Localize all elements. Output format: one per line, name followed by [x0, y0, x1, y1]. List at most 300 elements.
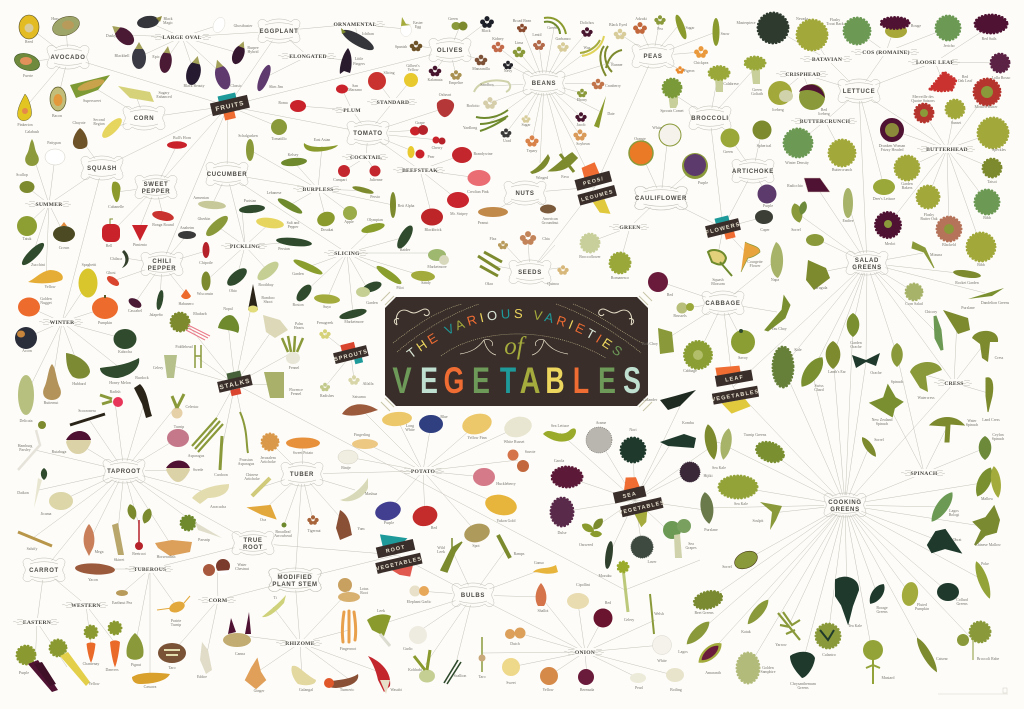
icon: grape tomato: Grape [415, 121, 425, 125]
icon: golden samphire [737, 653, 776, 683]
group: cooking greens [678, 423, 1003, 690]
icon: deers lettuce: Deer's Lettuce [873, 197, 895, 201]
icon: bintje: Bintje [341, 466, 351, 470]
icon: roma: Roma [278, 101, 288, 105]
icon: ghostbuster: Ghostbuster [234, 24, 253, 28]
icon: beet greens [692, 589, 724, 615]
hub: artichoke: ARTICHOKE [732, 169, 774, 175]
group: cucumbers [193, 119, 449, 324]
icon: caper: Caper [760, 228, 770, 232]
icon: poke: Poke [981, 562, 989, 566]
icon: yau choy: Yau Choy [771, 327, 787, 331]
group: tomatoes [278, 64, 493, 232]
icon: cipollini [567, 583, 590, 609]
hub: broccoli [689, 106, 731, 130]
icon: wild leek: Leek [437, 550, 445, 554]
icon: cascabel: Cascabel [128, 309, 142, 313]
hub: true root: TRUE [243, 538, 263, 544]
icon: pignut: Pignut [131, 663, 142, 667]
icon: easter egg: Easter [413, 21, 424, 25]
icon: tigernut: Tigernut [307, 529, 322, 533]
icon: catsear: Catsear [936, 657, 949, 661]
icon: celery: Celery [624, 618, 634, 622]
hub: standard: STANDARD [377, 100, 409, 106]
icon: ichiban: Ichiban [362, 32, 374, 36]
icon: prussian asparagus [238, 412, 255, 466]
hub: large framed labels [23, 19, 888, 607]
hub: burpless: BURPLESS [303, 187, 333, 193]
icon: flashy butter oak: Butter Oak [920, 217, 938, 221]
hub: chili pepper [141, 252, 183, 276]
icon: taro: Taro [168, 666, 176, 670]
icon: yellow finn [460, 410, 494, 440]
hub: slicing [324, 249, 368, 257]
banner: stalks [216, 368, 254, 399]
icon: tom thumb [967, 233, 995, 267]
icon: garden peer: Garden [292, 272, 304, 276]
icon: shallot [536, 583, 549, 613]
icon: cranberry [592, 79, 621, 89]
hub: lettuce [838, 79, 880, 103]
title: VEGETABLES: E [472, 360, 490, 401]
icon: marvel of four seasons: Merveille des [912, 95, 934, 99]
icon: anaheim [178, 226, 196, 239]
icon: ebony [577, 89, 587, 102]
title: VEGETABLES: S [623, 360, 641, 401]
icon: katuk [741, 597, 772, 634]
icon: blackbrick: Blackbrick [424, 228, 442, 232]
icon: adzuki: Adzuki [635, 17, 647, 21]
icon: campari [333, 165, 350, 182]
hub: beans: BEANS [532, 81, 556, 87]
title: VEGETABLES: B [545, 360, 565, 401]
icon: swede [166, 460, 203, 482]
icon: habanero: Habanero [178, 302, 194, 306]
hub: seeds: SEEDS [518, 270, 542, 276]
icon: wakame: Mozuku [599, 574, 612, 578]
icon: masterpiece [736, 13, 788, 43]
icon: sunset: Sunset [951, 121, 962, 125]
icon: golden nugget: Nugget [40, 301, 53, 305]
icon: wakame [599, 541, 614, 578]
icon: oarweed: Oarweed [579, 543, 593, 547]
icon: garden bakers: Bakers [902, 186, 913, 190]
hub: carrot [23, 558, 65, 582]
icon: raider: Raider [400, 248, 411, 252]
icon: purslane: Purslane [961, 306, 975, 310]
icon: oxheart [437, 93, 454, 117]
title: VEGETABLES: E [420, 360, 438, 401]
icon: yam: Yam [357, 527, 365, 531]
icon: rutabaga [52, 431, 91, 454]
hub: nuts: NUTS [515, 191, 535, 197]
icon: oca [250, 506, 275, 522]
icon: yellow onion [540, 667, 558, 692]
icon: mustard [863, 640, 895, 684]
icon: date bean [594, 96, 615, 128]
icon: yardlong: Yardlong [463, 126, 477, 130]
icon: tomatillo: Tomatillo [271, 137, 287, 141]
icon: pearl: Pearl [635, 686, 643, 690]
icon: scorzonera: Scorzonera [78, 409, 96, 413]
icon: sugary enhanced corn: Sugary [158, 91, 170, 95]
icon: white cauliflower: White [652, 126, 662, 130]
icon: katuk: Katuk [741, 630, 751, 634]
icon: tepary: Tepary [527, 149, 537, 153]
icon: mustard: Mustard [882, 676, 895, 680]
icon: green goliath [745, 57, 765, 96]
hub: cooking greens [824, 493, 866, 517]
icon: nori: Nori [629, 428, 637, 432]
icon: purple cauliflower [682, 153, 708, 185]
icon: yellow finn: Yellow Finn [467, 436, 487, 440]
hub: spinach: SPINACH [911, 471, 938, 477]
icon: lima [513, 41, 525, 57]
icon: green olive: Green [448, 17, 458, 21]
icon: american groundnut: American [542, 217, 558, 221]
icon: borage greens: Greens [876, 610, 888, 614]
icon: ti [262, 595, 286, 617]
hub: crisphead: CRISPHEAD [785, 72, 821, 78]
icon: sea kale: Sea Kale [712, 466, 726, 470]
hub: cress [934, 379, 972, 387]
icon: salsify: Salsify [27, 547, 37, 551]
hub: carrot: CARROT [29, 568, 59, 574]
hub: loose leaf [908, 58, 960, 66]
icon: endive [842, 188, 854, 223]
icon: arugula: Arugula [815, 286, 828, 290]
icon: cassava [132, 673, 170, 689]
icon: supersweet corn: Supersweet [83, 99, 102, 103]
icon: beit alpha slicer: Pilot [396, 286, 405, 290]
icon: brandywine [452, 147, 493, 163]
icon: epic [152, 45, 174, 74]
icon: jacob: Jacob [577, 123, 585, 127]
icon: turnip greens [744, 433, 786, 465]
icon: chicory [925, 310, 942, 350]
icon: kelsey [281, 153, 307, 167]
icon: blue potato: Blue [440, 415, 448, 419]
icon: romanesco: Romanesco [611, 276, 629, 280]
icon: flashy trout back [826, 18, 870, 44]
icon: jerusalem artichoke [260, 434, 278, 464]
icon: arame: Arame [596, 421, 607, 425]
group: cabbages [642, 242, 790, 373]
icon: celeriac [172, 394, 199, 418]
icon: buttercrunch [829, 140, 855, 172]
icon: ghostbuster [211, 15, 253, 35]
icon: beetroot [126, 503, 154, 556]
icon: coralina [643, 390, 696, 410]
icon: blackbrick [421, 208, 443, 232]
icon: savoie [508, 450, 536, 472]
hub: ornamental [333, 20, 385, 28]
icon: marketmore light [427, 249, 449, 269]
icon: speckles: Speckles [992, 148, 1006, 152]
icon: red potato: Red [431, 526, 437, 530]
icon: forellen [879, 118, 905, 152]
icon: broccoli rabe [957, 622, 999, 661]
icon: spaghetti: Spaghetti [82, 263, 96, 267]
title: VEGETABLES: L [573, 360, 589, 401]
icon: hamburg parsley [18, 421, 46, 470]
hub: squash [81, 156, 123, 180]
icon: black beauty [183, 54, 205, 88]
icon: zucchini: Zucchini [31, 263, 45, 267]
icon: spherical artichoke [752, 120, 772, 148]
hub: eastern: EASTERN [23, 620, 51, 626]
hub: bulbs [452, 583, 494, 607]
banner: sea vegetables: SEA [622, 491, 638, 500]
icon: wasabi: Wasabi [390, 688, 402, 692]
group: beans and pulses [463, 18, 623, 180]
icon: wasabi [368, 656, 402, 694]
icon: broccoflower [579, 234, 601, 259]
icon: mizuna [912, 242, 942, 268]
hub: large oval [151, 33, 211, 41]
icon: epic: Epic [152, 55, 160, 59]
icon: blackbell: Blackbell [115, 54, 129, 58]
hub: cos romaine: COS (ROMAINE) [862, 49, 910, 56]
hub: butterhead [917, 145, 975, 153]
icon: hijiki [680, 462, 713, 482]
icon: garden orache: Orache [850, 345, 862, 349]
icon: alfalfa: Alfalfa [362, 382, 374, 386]
icon: yukon gold: Yukon Gold [497, 519, 516, 523]
icon: hamburg parsley: Hamburg [18, 444, 32, 448]
hub: green cauliflower [609, 223, 649, 231]
icon: turnip ball: Savoy [738, 356, 748, 360]
icon: kabocha: Kabocha [118, 350, 132, 354]
icon: white onion: White [657, 659, 667, 663]
icon: huckleberry [473, 468, 516, 486]
icon: radish: Radish [110, 390, 120, 394]
icon: golden nugget: Golden [40, 297, 52, 301]
icon: purslane [943, 306, 975, 334]
icon: black beauty: Black Beauty [183, 84, 205, 88]
group: olives [395, 16, 494, 85]
icon: little fingers: Little [355, 57, 363, 61]
icon: slim jim [255, 63, 283, 93]
banner: sea vegetables: VEGETABLES [618, 500, 666, 516]
icon: boothbay [255, 258, 281, 287]
icon: nevada: Nevada [796, 17, 808, 21]
hub: olives [429, 38, 471, 62]
icon: lebanese [267, 191, 304, 216]
icon: radicchio [787, 178, 830, 192]
icon: burpee hybrid: Burpee [247, 46, 259, 50]
icon: kohlrabi: Kohlrabi [408, 668, 422, 672]
icon: ganso: Ganso [534, 561, 544, 565]
hub: batavian: BATAVIAN [812, 57, 842, 63]
icon: ginger [246, 660, 265, 693]
icon: horseradish: Horseradish [157, 555, 175, 559]
icon: spot: Spot [472, 544, 480, 548]
hub: eastern [13, 618, 59, 626]
icon: prairie turnip: Prairie [171, 619, 181, 623]
icon: scallion [444, 660, 466, 684]
hub: peas [632, 44, 674, 68]
hub: peas: PEAS [643, 54, 663, 60]
icon: purple russet: Purple [384, 521, 394, 525]
icon: bulls horn [167, 136, 191, 149]
icon: squash blossom: Squash [712, 278, 724, 282]
icon: fava [552, 154, 576, 179]
icon: rocket garden [953, 269, 981, 285]
icon: mashua [340, 478, 377, 501]
icon: horseradish [155, 540, 192, 559]
icon: cress: Cress [995, 356, 1004, 360]
icon: black olive: Black [481, 29, 491, 33]
hub: cocktail [342, 153, 388, 161]
icon: tea kale: Tea Kale [848, 624, 862, 628]
icon: borlotto: Borlotto [467, 104, 480, 108]
icon: lambs ear [826, 341, 847, 374]
icon: prairie turnip: Turnip [171, 623, 181, 627]
icon: canna [223, 612, 251, 656]
icon: red onion: Red [605, 601, 611, 605]
icon: prussian asparagus: Asparagus [238, 462, 255, 466]
icon: wisconsin: Wisconsin [197, 292, 213, 296]
icon: broccoli rabe: Broccoli Rabe [977, 657, 999, 661]
icon: sea grapes: Grapes [685, 546, 697, 550]
icon: bulls horn: Bull's Horn [173, 136, 191, 140]
icon: black magic: Magic [163, 21, 173, 25]
icon: squash blossom: Blossom [711, 282, 725, 286]
icon: pea: Pea [657, 27, 663, 31]
icon: lentil: Lentil [532, 33, 542, 37]
icon: red sails: Red Sails [982, 37, 997, 41]
icon: broadleaf arrowhead [274, 522, 292, 538]
icon: sorrel [806, 234, 824, 246]
icon: delicata [18, 375, 34, 423]
icon: fingerroot: Fingerroot [340, 647, 357, 651]
icon: bermuda [578, 669, 594, 692]
icon: red sails [975, 15, 1007, 41]
icon: dusky: Dusky [106, 34, 116, 38]
icon: cardoon: Cardoon [214, 473, 228, 477]
icon: sea kale large: Sea Kale [734, 502, 748, 506]
icon: mr stripey [447, 192, 469, 216]
icon: buttercup: Crown [59, 246, 69, 250]
icon: savoie: Savoie [525, 450, 536, 454]
hub: western [62, 601, 108, 609]
hub: beans [523, 71, 565, 95]
icon: mallow: Mallow [981, 497, 993, 501]
icon: satsuma [342, 395, 378, 416]
icon: garbanzo [555, 37, 571, 52]
icon: ghost: Ghost [106, 271, 117, 275]
icon: broad bean: Broad Bean [513, 19, 531, 23]
icon: slim jim: Slim Jim [269, 85, 283, 89]
icon: mashua: Mashua [365, 492, 377, 496]
hub: summer: SUMMER [36, 202, 63, 208]
icon: red oak leaf: Oak Leaf [958, 79, 973, 83]
group: broccoli and artichoke [660, 57, 776, 286]
hub: squash: SQUASH [87, 166, 117, 172]
icon: pigeon pea: Pigeon [684, 69, 694, 73]
icon: oxheart: Oxheart [439, 93, 452, 97]
icon: tom thumb: Bibb [977, 263, 985, 267]
icon: carola [552, 459, 582, 487]
icon: garden orache: Garden [850, 341, 862, 345]
icon: amaranth: Amaranth [705, 671, 721, 675]
hub: avocado: AVOCADO [50, 55, 86, 61]
icon: sugary enhanced corn: Enhanced [156, 95, 172, 99]
icon: purple carrot: Purple [19, 671, 29, 675]
icon: pattypan: Pattypan [47, 141, 61, 145]
icon: new zealand spinach: Spinach [876, 422, 888, 426]
icon: welsh: Welsh [654, 612, 664, 616]
icon: lagos bologi: Bologi [949, 513, 959, 517]
icon: lotus root: Lotus [360, 587, 369, 591]
icon: parsnip: Parsnip [198, 538, 210, 542]
icon: fluted pumpkin: Pumpkin [915, 607, 929, 611]
icon: flashy trout back: Trout Back [826, 22, 844, 26]
icon: mooli [84, 524, 104, 556]
icon: fuerte: Fuerte [23, 74, 33, 78]
icon: chinese mallow: Chinese Mallow [975, 543, 1001, 547]
hub: cabbage [702, 291, 744, 315]
icon: boothbay: Boothbay [258, 283, 274, 287]
hub: potato [400, 467, 444, 475]
icon: fennel [282, 336, 303, 370]
icon: masterpiece: Masterpiece [736, 21, 756, 25]
icon: kale [773, 347, 802, 387]
hub: salad greens: SALAD [855, 258, 879, 264]
icon: classic [210, 58, 242, 91]
icon: little fingers: Fingers [353, 62, 365, 66]
icon: little fingers [340, 48, 365, 74]
icon: swiss chard: Swiss [814, 384, 824, 388]
icon: water spinach [930, 418, 978, 442]
hub: crisphead [776, 70, 828, 78]
icon: lolla rosso [991, 54, 1010, 80]
icon: dolichos: Dolichos [580, 21, 595, 25]
icon: tigernut [307, 515, 322, 533]
hub: chili pepper: CHILI [152, 259, 172, 265]
icon: purple russet [373, 499, 403, 525]
icon: ceylon spinach: Ceylon [992, 433, 1004, 437]
icon: tatuk [17, 216, 37, 241]
icon: poke [972, 560, 994, 600]
icon: red oak leaf: Red [962, 75, 968, 79]
hub: corn: CORN [134, 116, 154, 122]
icon: bell pepper: Bell [106, 244, 112, 248]
icon: kale: Kale [794, 348, 802, 352]
icon: golden nugget [18, 297, 53, 316]
icon: san marzano [336, 84, 362, 94]
icon: tea kale [836, 578, 862, 628]
icon: kabocha [114, 329, 136, 354]
icon: navy: Navy [504, 69, 512, 73]
icon: chinese mallow [974, 507, 1001, 547]
icon: amaranth [694, 639, 726, 675]
icon: satsuma: Satsuma [352, 395, 366, 399]
hub: seeds [509, 260, 551, 284]
group: salad greens [773, 178, 1010, 422]
icon: yau choy [765, 296, 790, 331]
hub: butterhead: BUTTERHEAD [926, 147, 968, 153]
icon: schalgurken [238, 134, 258, 161]
icon: sweet onion [502, 658, 520, 685]
icon: honey melon [100, 358, 139, 385]
icon: hubbard [66, 353, 90, 386]
icon: iceberg: Iceberg [772, 108, 784, 112]
banner: fruits: FRUITS [215, 100, 245, 113]
icon: pickling gherkin [198, 213, 231, 239]
icon: turnip [167, 425, 189, 447]
